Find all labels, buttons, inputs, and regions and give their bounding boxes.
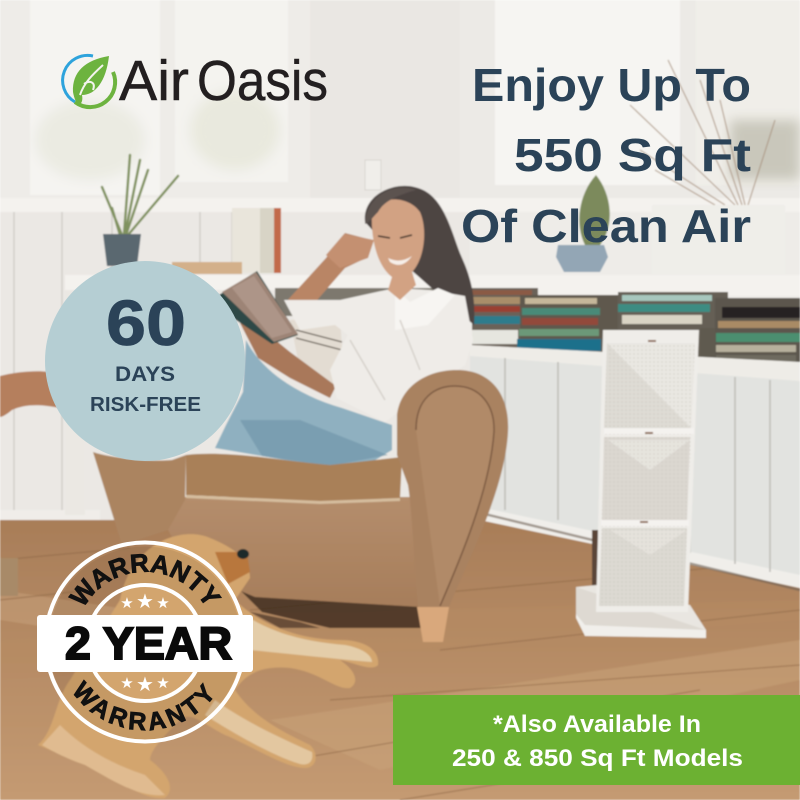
headline line 2: 550 Sq Ft (514, 129, 751, 181)
icon: green arc (75, 72, 115, 107)
icon: leaf (73, 56, 109, 105)
dog hind fur (42, 725, 165, 795)
chair leg (417, 607, 449, 642)
vase with plant (556, 175, 610, 272)
badge line: days: DAYS (115, 363, 175, 386)
outer ring (46, 542, 244, 742)
stars bottom (120, 672, 170, 696)
badge: 60 days risk-free (45, 261, 245, 461)
white box on shelf (652, 205, 785, 275)
bare feet (0, 371, 60, 417)
hair back (365, 186, 474, 325)
badge circle (45, 261, 245, 461)
shirt (284, 288, 473, 422)
armchair (93, 370, 508, 642)
inner ring (87, 585, 203, 701)
wainscot panelling (0, 198, 800, 540)
books on left shelf (172, 208, 281, 274)
dog lying shadow (250, 612, 320, 628)
jeans (215, 340, 392, 467)
stars top: ★ (120, 594, 134, 612)
logo: Air Oasis (63, 49, 328, 113)
eyes and brows (378, 235, 412, 238)
left arm (93, 452, 186, 545)
curved text bottom: WARRANTY (74, 679, 213, 731)
right arm (397, 370, 508, 607)
golden retriever (38, 534, 378, 798)
hand at hair (326, 234, 374, 268)
book stacks (472, 288, 800, 366)
badge line: risk-free: RISK-FREE (90, 394, 201, 416)
left window (0, 0, 312, 205)
dark band tint (67, 565, 223, 721)
headline line 3: Of Clean Air (461, 200, 751, 252)
stars top (120, 589, 170, 613)
smile (388, 256, 412, 265)
woman (215, 186, 474, 467)
air purifier (576, 330, 706, 638)
dog nose (237, 549, 249, 559)
face and neck (372, 199, 424, 300)
banner text: 2 YEAR (65, 618, 232, 669)
headline (461, 59, 751, 252)
left plant (102, 155, 178, 266)
seat cushion (186, 454, 402, 501)
cushion behind (290, 318, 345, 390)
floor (0, 520, 800, 800)
dried branches (630, 60, 775, 205)
headline line 1: Enjoy Up To (472, 59, 751, 111)
callout: other models (393, 695, 800, 785)
badge number: 60 (106, 287, 186, 359)
lower arm and hand (240, 323, 336, 398)
wordmark: Oasis: Oasis (197, 49, 328, 113)
stars bottom: ★ (136, 672, 154, 696)
book (219, 271, 298, 344)
wordmark: Air (119, 49, 189, 113)
callout line 1: *Also Available In (493, 711, 701, 738)
dog upper leg fur (245, 615, 372, 662)
hair front (365, 188, 416, 224)
low cabinet (468, 345, 800, 590)
dog body (38, 534, 378, 798)
chair body (168, 497, 420, 607)
callout panel (393, 695, 800, 785)
raised arm (285, 233, 372, 306)
right window (310, 0, 800, 200)
dog lower leg fur (205, 700, 312, 764)
dog muzzle (215, 552, 250, 584)
shadow under chair (240, 590, 425, 628)
callout line 2: 250 & 850 Sq Ft Models (452, 745, 743, 772)
warranty seal (37, 540, 253, 744)
stars top: ★ (136, 589, 154, 613)
icon: leaf vein (80, 65, 103, 95)
stars bottom: ★ (120, 674, 134, 692)
curved text top: WARRANTY (68, 554, 222, 605)
banner (37, 615, 253, 672)
stars top: ★ (156, 594, 170, 612)
shelf top (65, 275, 800, 296)
icon: blue arc (63, 55, 93, 102)
stars bottom: ★ (156, 674, 170, 692)
